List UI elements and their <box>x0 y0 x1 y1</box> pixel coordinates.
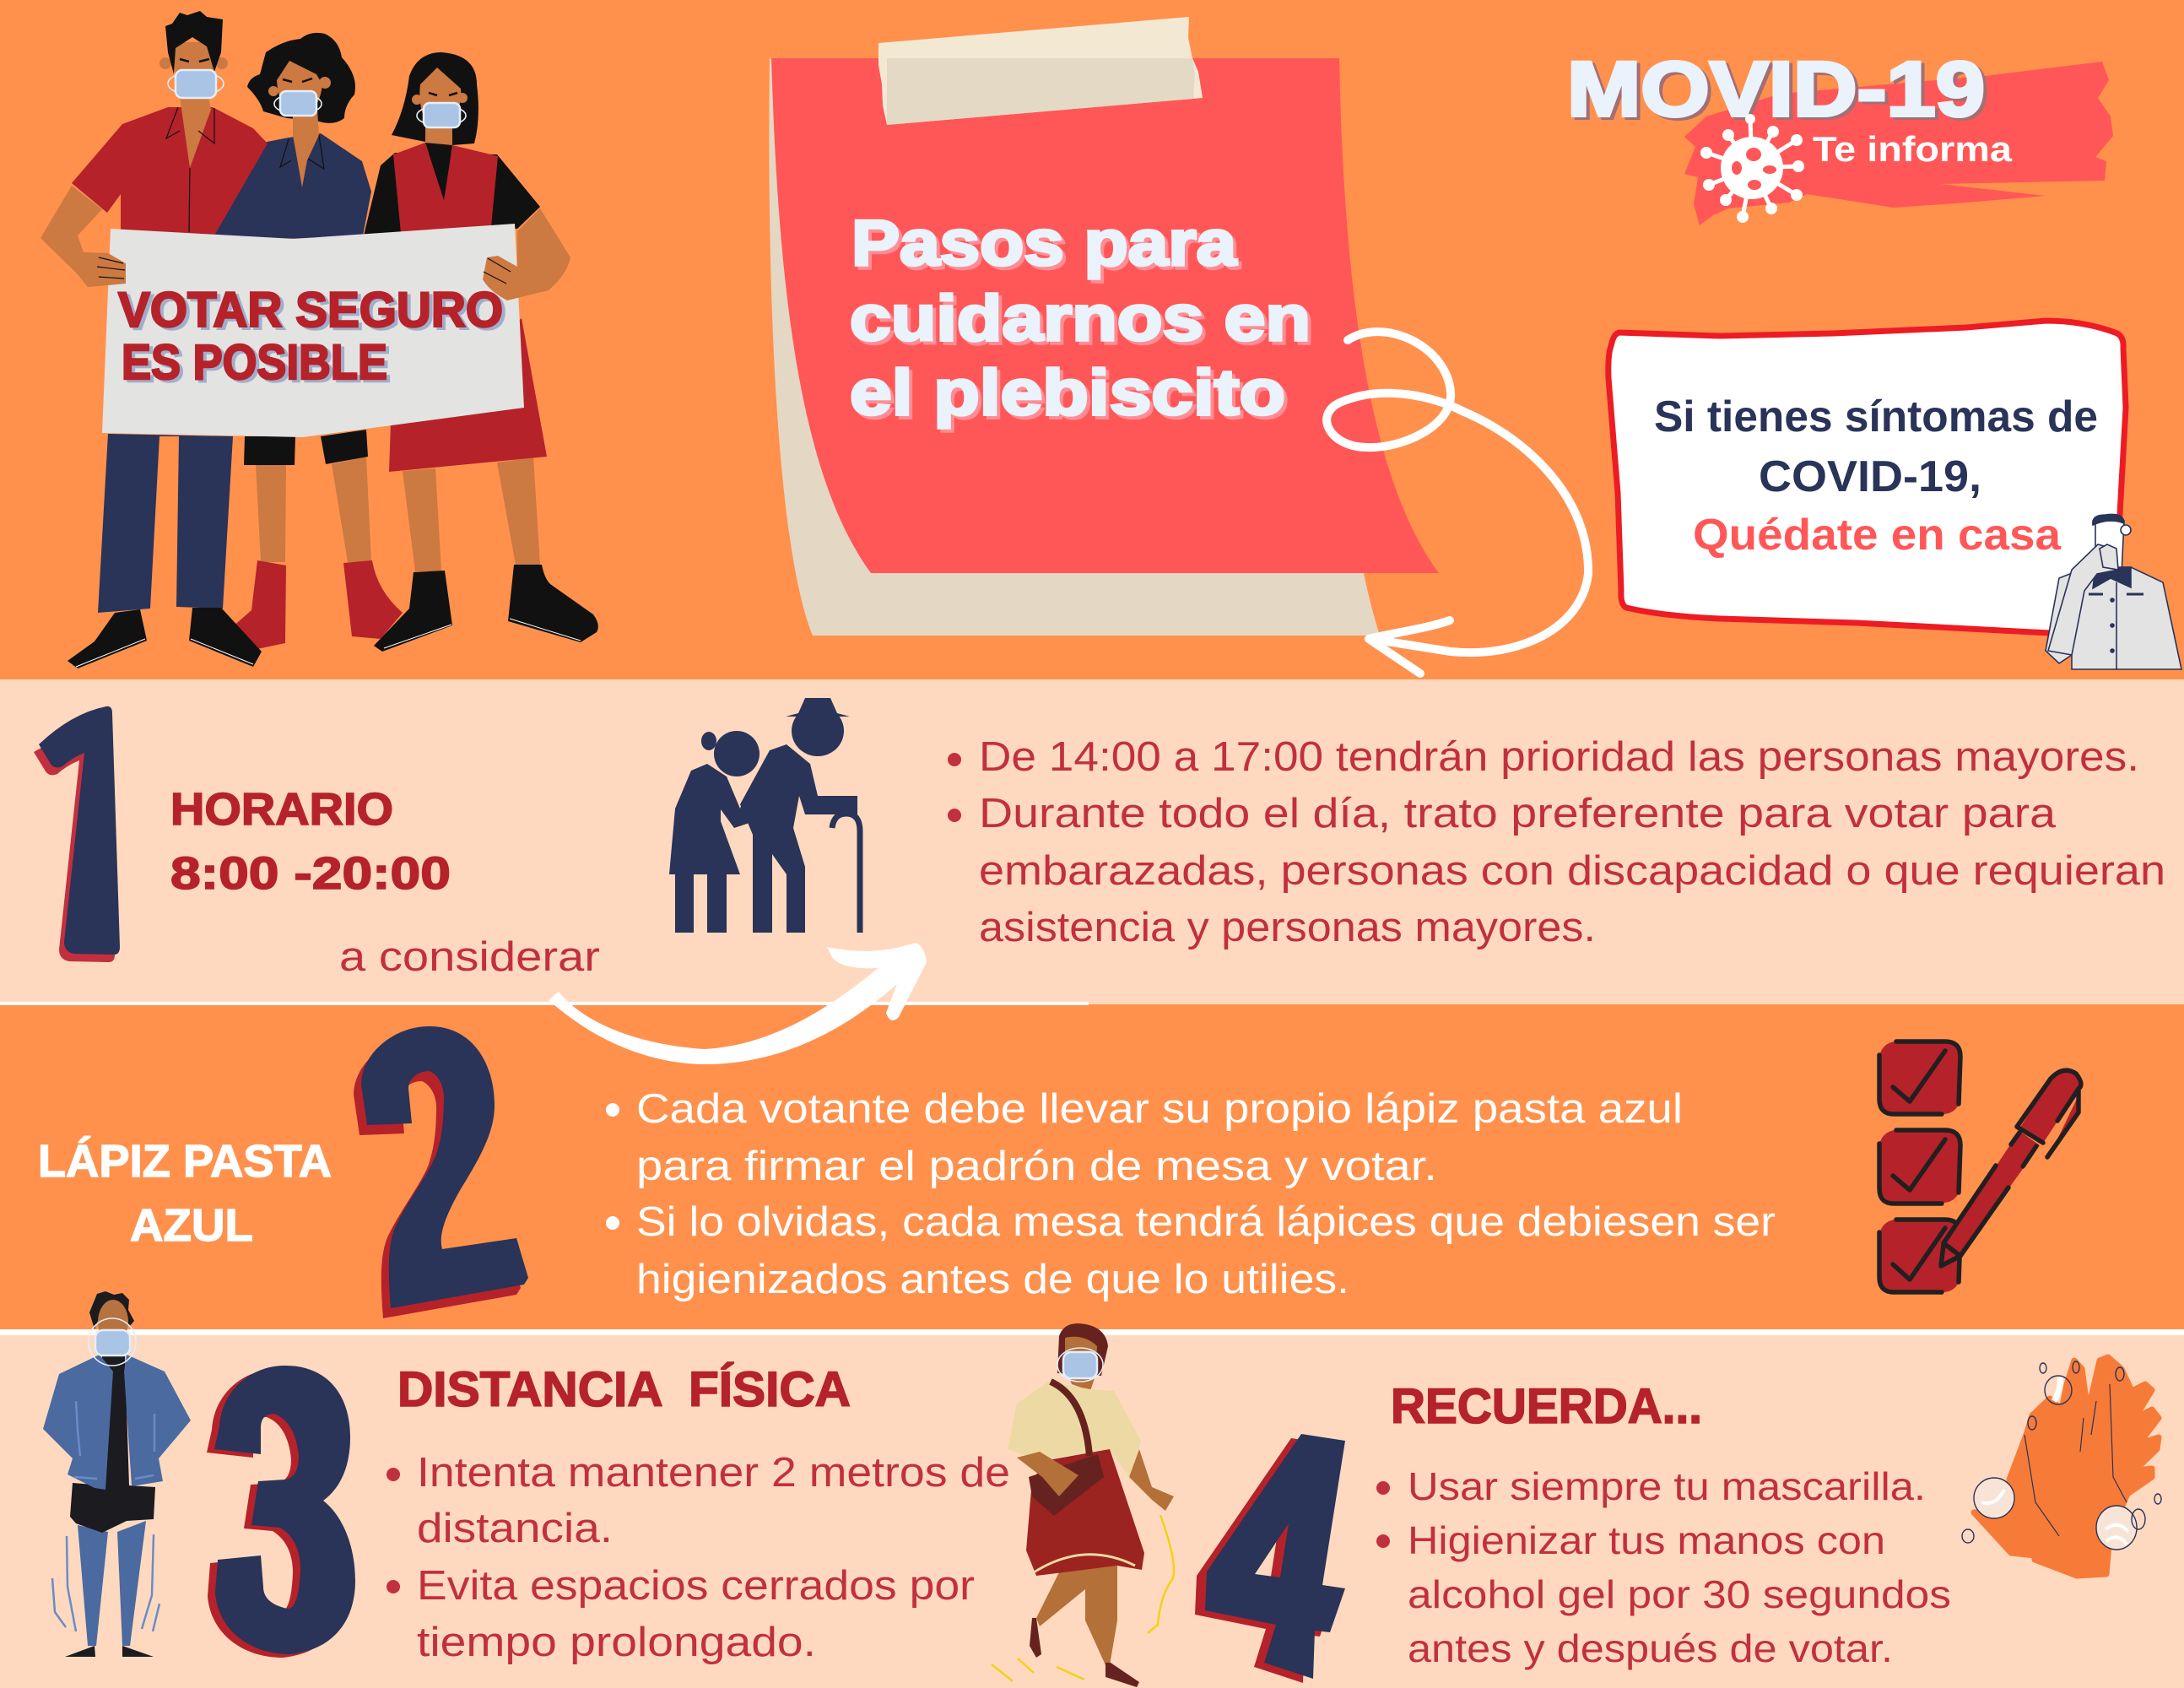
checkbox 1 <box>1879 1041 1960 1114</box>
title: pasos para cuidarnos en el plebiscito: el plebiscito <box>850 357 1285 429</box>
heading: horario: HORARIO <box>170 784 393 835</box>
pen <box>1941 1070 2081 1266</box>
paper: red front sheet <box>771 58 1439 573</box>
callout: symptoms box <box>1608 321 2126 633</box>
illustration: masked person with jacket <box>43 1291 191 1657</box>
text: step 3 bullets: Evita espacios cerrados por <box>417 1563 975 1609</box>
heading: distancia fisica: DISTANCIA FÍSICA <box>397 1362 851 1417</box>
text: step 4 bullets <box>1376 1464 1951 1670</box>
callout text: Si tienes síntomas de <box>1654 392 2098 441</box>
icon: hands washing with bubbles <box>1962 1357 2161 1576</box>
text: step 1 bullets: asistencia y personas mayores. <box>979 905 1596 950</box>
note paper with tape <box>769 17 1439 636</box>
sign text <box>118 283 506 392</box>
sign board <box>102 224 524 437</box>
logo: te informa: Te informa <box>1813 129 2013 169</box>
text: step 3 bullets <box>387 1450 1010 1665</box>
text: step 4 bullets: Higienizar tus manos con <box>1408 1518 1885 1562</box>
heading: lapiz pasta azul <box>38 1136 332 1251</box>
person: man on the left <box>41 11 268 668</box>
title: pasos para cuidarnos en el plebiscito: cuidarnos en <box>853 286 1314 358</box>
callout frame <box>1608 321 2126 633</box>
text: step 3 bullets: Intenta mantener 2 metros de <box>417 1450 1010 1496</box>
numeral: 2 <box>354 1026 528 1318</box>
person: woman on the right <box>364 52 598 652</box>
text: step 2 bullets <box>606 1086 1776 1302</box>
text: step 4 bullets: Usar siempre tu mascarilla. <box>1408 1464 1926 1508</box>
numeral: 3 <box>207 1366 355 1658</box>
text: step 4 bullets: antes y después de votar. <box>1408 1626 1893 1670</box>
heading: horario <box>170 784 451 899</box>
checkbox 3 <box>1879 1220 1960 1292</box>
heading: horario: 8:00 -20:00 <box>170 848 451 899</box>
title: pasos para cuidarnos en el plebiscito: Pasos para <box>851 208 1237 279</box>
text: step 1 bullets <box>948 734 2165 950</box>
illustration: masked woman walking <box>992 1323 1174 1687</box>
title: pasos para cuidarnos en el plebiscito: Pasos para <box>855 211 1241 283</box>
text: step 2 bullets: para firmar el padrón de mesa y votar. <box>636 1144 1437 1189</box>
person: woman in the centre <box>214 33 403 650</box>
icon: white virus <box>1700 114 1804 223</box>
paper: back sheet <box>769 58 1380 636</box>
text: a considerar: a considerar <box>339 934 600 980</box>
heading: lapiz pasta azul: AZUL <box>130 1200 253 1251</box>
callout text: COVID-19, <box>1759 452 1981 501</box>
text: step 2 bullets: Si lo olvidas, cada mesa tendrá lápices que debiesen ser <box>636 1199 1776 1245</box>
checkbox 2 <box>1879 1130 1960 1204</box>
band: header background <box>0 0 2184 679</box>
sign text: ES POSIBLE <box>125 338 391 392</box>
heading: recuerda: RECUERDA... <box>1391 1379 1702 1434</box>
text: step 3 bullets: distancia. <box>417 1506 613 1551</box>
text: step 1 bullets: De 14:00 a 17:00 tendrán prioridad las personas mayores. <box>979 734 2139 780</box>
illustration: three people holding a sign <box>41 11 598 668</box>
text: step 2 bullets: Cada votante debe llevar su propio lápiz pasta azul <box>636 1086 1683 1132</box>
arrow: from a considerar to bullets <box>549 943 927 1064</box>
sign text: ES POSIBLE <box>122 335 387 390</box>
title: pasos para cuidarnos en el plebiscito: cuidarnos en <box>850 283 1311 354</box>
text: step 1 bullets: embarazadas, personas con discapacidad o que requieran <box>979 848 2165 894</box>
numeral: 1 <box>34 706 120 962</box>
band: step 2 background <box>0 1004 2184 1329</box>
logo: MOVID-19 wordmark: MOVID-19 <box>1570 49 1988 135</box>
logo: red brush stroke <box>1684 62 2113 225</box>
tape <box>878 17 1203 125</box>
title: pasos para cuidarnos en el plebiscito <box>850 208 1314 432</box>
icon: elderly couple <box>669 698 860 933</box>
text: step 2 bullets: higienizados antes de que lo utilies. <box>636 1257 1349 1302</box>
hands over the sign <box>78 252 549 300</box>
sign text: VOTAR SEGURO <box>122 285 506 340</box>
title: pasos para cuidarnos en el plebiscito: el plebiscito <box>853 360 1289 432</box>
text: step 1 bullets: Durante todo el día, trato preferente para votar para <box>979 791 2057 836</box>
text: step 3 bullets: tiempo prolongado. <box>417 1620 816 1665</box>
callout text: Quédate en casa <box>1693 511 2062 560</box>
sign text: VOTAR SEGURO <box>118 283 503 338</box>
band: steps 3 and 4 background <box>0 1335 2184 1688</box>
numeral: 4 <box>1195 1434 1345 1683</box>
band: step 1 background <box>0 679 2184 1004</box>
callout text <box>1654 392 2098 560</box>
illustration: man coughing into tissue <box>2046 514 2181 669</box>
arrow: curly arrow from note down to the paper corner <box>1327 332 1588 674</box>
text: step 4 bullets: alcohol gel por 30 segundos <box>1408 1572 1951 1616</box>
logo: MOVID-19 wordmark: MOVID-19 <box>1567 46 1985 133</box>
icon: checklist and pen <box>1879 1041 2081 1292</box>
heading: lapiz pasta azul: LÁPIZ PASTA <box>38 1136 332 1187</box>
